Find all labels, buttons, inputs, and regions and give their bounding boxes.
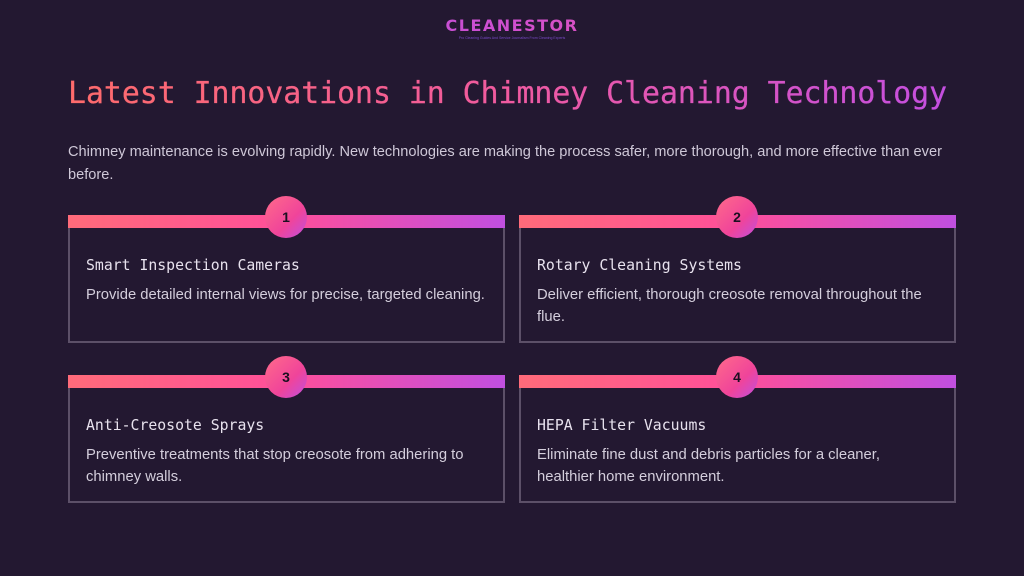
- card 2: 2: [733, 209, 741, 225]
- card 2: Rotary Cleaning Systems: [537, 257, 742, 274]
- card 4: healthier home environment.: [537, 469, 725, 485]
- card 4: [519, 356, 956, 503]
- card 3: Anti-Creosote Sprays: [86, 417, 264, 434]
- card 4: 4: [733, 369, 741, 385]
- card 2: Deliver efficient, thorough creosote removal throughout the: [537, 287, 922, 303]
- card 4: HEPA Filter Vacuums: [537, 417, 706, 434]
- card 1: 1: [282, 209, 290, 225]
- card 3: 3: [282, 369, 290, 385]
- card 3: Preventive treatments that stop creosote from adhering to: [86, 447, 464, 463]
- title: Latest Innovations in Chimney Cleaning Technology: [68, 76, 947, 111]
- logo: CLEANESTOR: [446, 16, 578, 35]
- card 3: chimney walls.: [86, 469, 182, 485]
- subtitle: Chimney maintenance is evolving rapidly. New technologies are making the process safer, more thorough, and more effective than ever before.: [68, 144, 942, 183]
- card 4: Eliminate fine dust and debris particles for a cleaner,: [537, 447, 880, 463]
- card 1: Provide detailed internal views for precise, targeted cleaning.: [86, 287, 485, 303]
- card 2: flue.: [537, 309, 565, 325]
- card 2: [519, 196, 956, 343]
- card 1: [68, 196, 505, 343]
- logo: Pro Cleaning Guides And Service Journalism From Cleaning Experts: [459, 36, 565, 40]
- card 1: Smart Inspection Cameras: [86, 257, 300, 274]
- card 3: [68, 356, 505, 503]
